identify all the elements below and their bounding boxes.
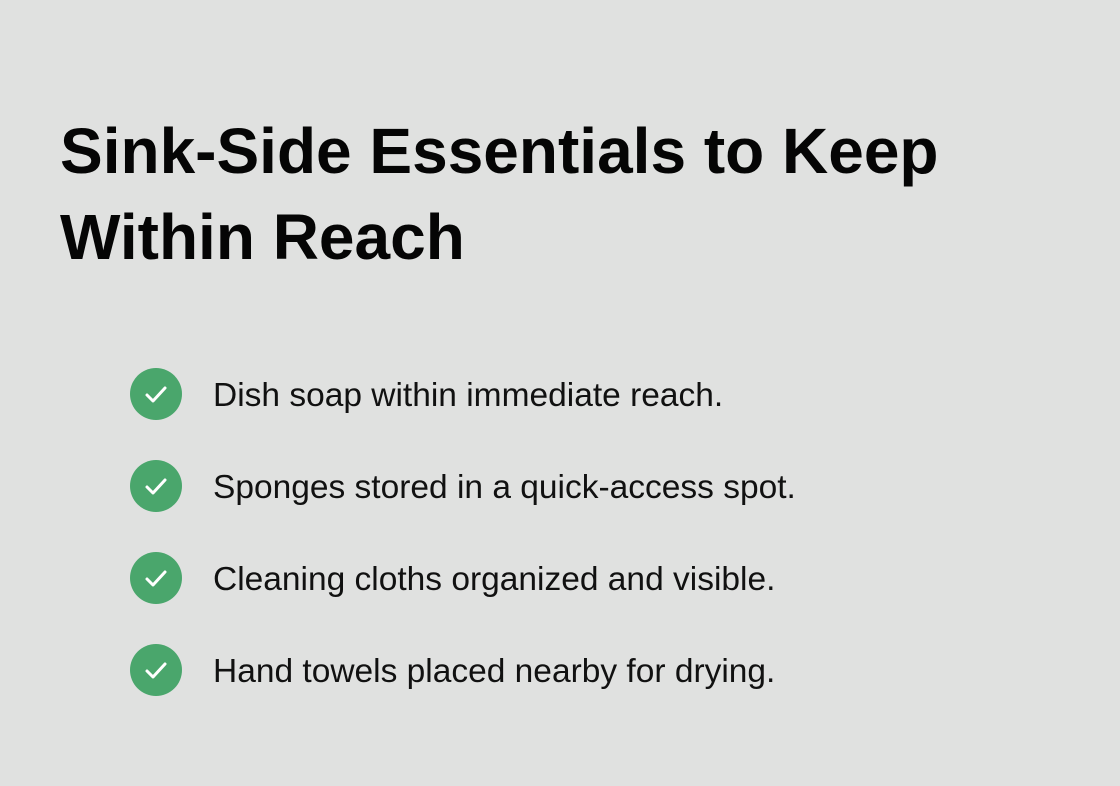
title — [60, 115, 938, 273]
item: cloths: Cleaning cloths organized and visible. — [213, 561, 775, 598]
title: Sink-Side Essentials to Keep — [60, 115, 938, 187]
item: towels — [130, 644, 775, 696]
item: towels: Hand towels placed nearby for drying. — [213, 653, 775, 690]
item: dish soap — [130, 368, 723, 420]
item: sponges: Sponges stored in a quick-access spot. — [213, 469, 796, 506]
title: Within Reach — [60, 201, 465, 273]
item: cloths — [130, 552, 775, 604]
item: dish soap: Dish soap within immediate reach. — [213, 377, 723, 414]
item: sponges — [130, 460, 796, 512]
